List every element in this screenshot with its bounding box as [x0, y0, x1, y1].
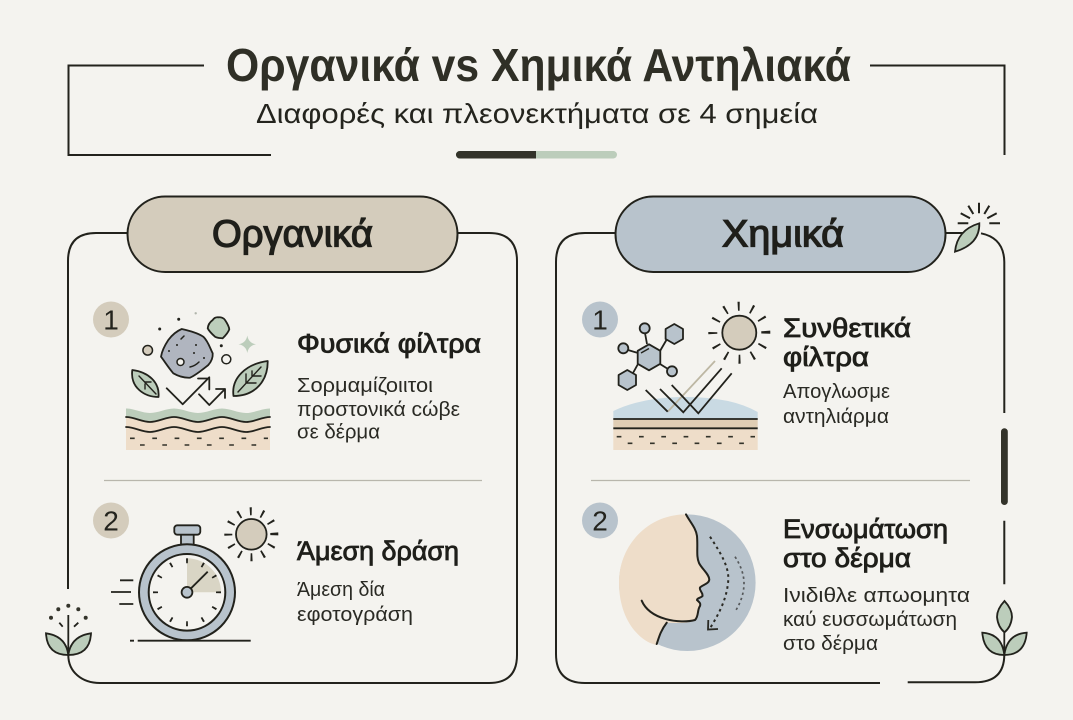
particles: [143, 312, 231, 364]
header frame right: [870, 66, 1004, 155]
text: natural filters: [297, 328, 481, 444]
badge 1 organic: 1: [103, 304, 119, 336]
text: immediate action: Άμεση δία: [297, 578, 385, 601]
text: immediate action: Άμεση δράση: [297, 536, 459, 566]
chemical heading pill: [616, 196, 946, 272]
reflection arrows: [167, 377, 225, 405]
circle background: [619, 514, 756, 651]
icon: face profile with absorption arrows: [619, 514, 756, 651]
title accent bar: [456, 151, 617, 158]
text: skin integration: στο δέρμα: [783, 632, 878, 655]
text: synthetic filters: Συνθετικά: [783, 313, 911, 343]
icon: molecule, sun and reflection on skin: [613, 306, 766, 450]
small green stone: [208, 317, 229, 338]
badge 2 organic: 2: [103, 506, 119, 536]
badge 1 chemical: 1: [592, 304, 608, 336]
header section: [68, 39, 1004, 158]
molecule: [618, 323, 683, 390]
stopwatch crown: [174, 525, 200, 545]
badge 2 chemical: [582, 502, 618, 538]
thick accent on right edge: [1001, 428, 1008, 505]
face outline: [642, 514, 709, 644]
badge 1 organic: [93, 302, 129, 338]
text: natural filters: Φυσικά φίλτρα: [297, 328, 481, 358]
text: natural filters: προστονικά cώβε: [297, 398, 460, 421]
left leaf: [132, 370, 159, 397]
text: immediate action: εφοτογράση: [297, 603, 413, 626]
title: Οργανικά vs Χημικά Αντηλιακά: [226, 39, 851, 91]
icon: corner plant left: [46, 604, 91, 655]
text: skin integration: στο δέρμα: [783, 543, 911, 573]
organic heading pill: Οργανικά: [212, 214, 373, 256]
icon: stopwatch with sun: [111, 511, 274, 641]
text: synthetic filters: φίλτρα: [783, 342, 869, 372]
text: immediate action: [297, 536, 459, 626]
icon: mineral filter on skin: [126, 312, 270, 450]
subtitle: Διαφορές και πλεονεκτήματα σε 4 σημεία: [256, 98, 818, 129]
organic heading pill: [128, 196, 458, 272]
text: skin integration: [783, 514, 970, 655]
dotted absorption arrows: [708, 537, 744, 630]
text: synthetic filters: αντηλιάρμα: [783, 405, 889, 428]
panel outline organic: [68, 233, 517, 683]
chemical heading pill: Χημικά: [722, 214, 844, 256]
panel outline chemical: [556, 233, 880, 683]
badge 1 chemical: [582, 302, 618, 338]
icon: corner plant right: [982, 601, 1027, 655]
text: skin integration: Ενσωμάτωση: [783, 514, 948, 544]
panel: organic: [46, 196, 517, 683]
right leaf: [233, 361, 268, 396]
header frame left: [68, 66, 271, 155]
skin layers: [613, 397, 758, 450]
text: skin integration: Ινιδιθλε απωομητα: [783, 584, 970, 607]
sun: [228, 511, 274, 557]
stopwatch body: [139, 544, 235, 640]
text: natural filters: σε δέρμα: [297, 420, 380, 444]
text: skin integration: καύ ευσσωμάτωση: [783, 608, 957, 631]
panel right edge: [908, 233, 1004, 682]
panel: chemical: [556, 196, 1027, 683]
text: synthetic filters: Απογλωσμε: [783, 380, 890, 403]
text: natural filters: Σορμαμίζοιιτοι: [297, 374, 433, 397]
badge 2 organic: [93, 502, 129, 538]
face area: [619, 514, 709, 645]
badge 2 chemical: 2: [592, 506, 608, 536]
sparkle: [238, 336, 256, 353]
sun: [713, 306, 766, 359]
reflected rays: [646, 361, 732, 413]
speed lines and ground: [111, 580, 251, 641]
mineral rock: [161, 329, 213, 378]
skin layers: [126, 408, 270, 450]
text: synthetic filters: [783, 313, 911, 428]
icon: leaf and sunburst: [955, 203, 1000, 252]
